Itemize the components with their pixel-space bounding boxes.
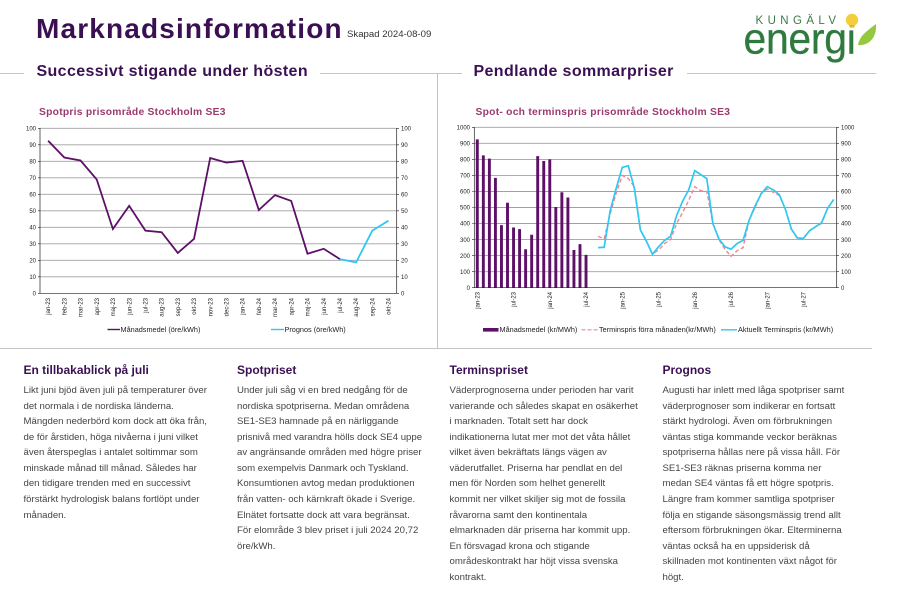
month labels: jan-26 (693, 291, 699, 310)
body text: varierande och således skapat en osäkerhet (450, 401, 638, 412)
month labels: nov-23 (208, 297, 214, 316)
body text: Väderprognoserna under perioden har varit (450, 385, 634, 396)
heading: Terminspriset (450, 363, 528, 377)
right axis labels: 600 (841, 190, 852, 196)
month labels: okt-24 (387, 297, 393, 315)
left axis labels: 60 (29, 192, 37, 198)
left axis labels: 40 (29, 226, 37, 232)
legend: Månadsmedel (kr/MWh) (500, 325, 577, 334)
chart title: spot price: Spotpris prisområde Stockholm SE3 (39, 107, 226, 118)
month labels: dec-23 (224, 297, 230, 316)
month labels: apr-23 (95, 297, 101, 315)
month labels: apr-24 (289, 297, 295, 315)
body text: öre/kWh. (237, 541, 275, 552)
body text: förstärkt hydrologisk balans fortlöpt under (24, 494, 199, 505)
month labels: jan-24 (241, 297, 247, 316)
month labels: maj-23 (111, 297, 117, 316)
bars: Månadsmedel (477, 139, 834, 288)
left axis labels: 30 (29, 242, 37, 248)
body text (237, 385, 422, 552)
body text (662, 385, 844, 583)
body text: högt. (662, 572, 684, 583)
body text: kommit ner vilket skiljer sig mot de fossila (450, 494, 625, 505)
left axis labels: 90 (29, 143, 37, 149)
series: Terminspris förra månaden (598, 175, 834, 256)
chart title: spot and forward price: Spot- och terminspris prisområde Stockholm SE3 (476, 107, 730, 118)
left axis labels: 800 (460, 158, 471, 164)
month labels: mar-23 (79, 297, 85, 317)
body text: medan SE4 väntas få ett högre spotpris. (662, 478, 834, 489)
right axis labels: 0 (841, 286, 845, 292)
body text: minskade månad till månad. Således har (24, 463, 197, 474)
body text (24, 385, 207, 521)
body text: det normala i de nordiska länderna. (24, 401, 174, 412)
combo chart: spot and forward price (457, 125, 855, 334)
body text: Mängden nederbörd kom dock att öka från, (24, 416, 207, 427)
month labels (475, 291, 808, 310)
right axis labels: 200 (841, 254, 852, 260)
month labels: jan-23 (46, 297, 52, 316)
left axis labels: 400 (460, 222, 471, 228)
month labels: jan-25 (620, 291, 626, 310)
body text: väntas stiga kommande veckor beräknas (662, 432, 837, 443)
right axis labels: 20 (401, 258, 408, 264)
body text: indikationerna lutat mer mot det våta hållet (450, 432, 630, 443)
right axis labels: 40 (401, 226, 408, 232)
month labels: jul-24 (338, 297, 344, 314)
legend (483, 325, 833, 334)
right axis labels: 900 (841, 142, 852, 148)
month labels (46, 297, 393, 317)
month labels: jul-26 (729, 291, 735, 308)
body text: följa en stigande säsongsmässig trend allt (662, 510, 841, 521)
month labels: maj-24 (306, 297, 312, 316)
left axis labels: 50 (29, 209, 37, 215)
creation date: Skapad 2024-08-09 (347, 29, 431, 40)
body text: av angränsande områden med högre priser (237, 447, 422, 458)
left axis labels: 80 (29, 160, 37, 166)
body text: i marknaden. Totalt sett har dock (450, 416, 588, 427)
body text: väntas också ha en uppsiderisk då (662, 541, 810, 552)
body text: även återspeglas i antalet soltimmar som (24, 447, 198, 458)
left axis labels: 200 (460, 254, 471, 260)
body text: För elområde 3 blev priset i juli 2024 20,72 (237, 525, 418, 536)
body text (450, 385, 638, 583)
right axis labels: 0 (401, 292, 405, 298)
month labels: jul-23 (512, 291, 518, 308)
body text: väderprognoser som indikerar en fortsatt (662, 401, 835, 412)
body text: Likt juni bjöd även juli på temperaturer över (24, 385, 207, 396)
month labels: feb-24 (257, 297, 263, 315)
month labels: mar-24 (273, 297, 279, 317)
title: Marknadsinformation (36, 13, 343, 44)
right axis labels: 400 (841, 222, 852, 228)
body text: Under juli såg vi en bred nedgång för de (237, 385, 408, 396)
body text: Augusti har inlett med låga spotpriser samt (662, 385, 844, 396)
line chart: spot price (26, 126, 412, 334)
month labels: jul-27 (802, 291, 808, 308)
month labels: jan-24 (548, 291, 554, 310)
body text: från vatten- och kärnkraft ökade i Sverige. (237, 494, 415, 505)
body text: Elnätet fortsatte dock att vara begränsat. (237, 510, 410, 521)
left axis labels: 300 (460, 238, 471, 244)
body text: men för Norden som helhet generellt (450, 478, 605, 489)
month labels: jun-24 (322, 297, 328, 316)
month labels: jul-25 (657, 291, 663, 308)
heading: Spotpriset (237, 363, 296, 377)
text column: Prognos (662, 363, 844, 583)
month labels: aug-23 (160, 297, 166, 317)
logo: Kungälv Energi: energi (744, 15, 856, 64)
series: Månadsmedel (48, 141, 340, 259)
body text: stärkt hydrologi. Även om förbrukningen (662, 416, 832, 427)
right axis labels: 50 (401, 209, 408, 215)
body text: nordiska spotpriserna. Medan områdena (237, 401, 409, 412)
right axis labels: 800 (841, 158, 852, 164)
right axis labels: 1000 (841, 126, 855, 132)
month labels: jun-23 (127, 297, 133, 316)
right axis labels: 500 (841, 206, 852, 212)
logo: Kungälv Energi: KUNGÄLV (756, 15, 840, 27)
series: Prognos (340, 221, 388, 262)
body text: den tidigare trenden med en successivt (24, 478, 190, 489)
body text: månaden. (24, 510, 66, 521)
body text: prisnivå med varandra hölls dock SE4 uppe (237, 432, 422, 443)
right axis labels: 80 (401, 160, 408, 166)
month labels: jan-27 (765, 291, 771, 310)
heading: Prognos (662, 363, 711, 377)
left axis labels: 600 (460, 190, 471, 196)
month labels: okt-23 (192, 297, 198, 315)
legend: Prognos (öre/kWh) (284, 325, 346, 334)
left axis labels: 500 (460, 206, 471, 212)
heading: En tillbakablick på juli (24, 363, 149, 377)
body text: kontrakt. (450, 572, 486, 583)
right axis labels: 60 (401, 192, 408, 198)
heading: left section: Successivt stigande under hösten (36, 62, 308, 80)
right axis labels: 10 (401, 275, 408, 281)
right axis labels: 300 (841, 238, 852, 244)
right axis labels: 30 (401, 242, 408, 248)
right axis labels: 100 (401, 126, 412, 132)
body text: spotpriserna hållas nere på vissa håll. För (662, 447, 840, 458)
body text: elmarknaden där priserna har kommit upp. (450, 525, 630, 536)
legend: Aktuellt Terminspris (kr/MWh) (738, 325, 833, 334)
body text: väderutfallet. Priserna har pendlat en del (450, 463, 622, 474)
left axis labels: 100 (460, 270, 471, 276)
body text: Konsumtionen avtog medan produktionen (237, 478, 415, 489)
body text: de för årstiden, höga nivåerna i juni vilket (24, 432, 198, 443)
month labels: jan-23 (475, 291, 481, 310)
left axis labels: 1000 (457, 126, 471, 132)
body text: En försvagad krona och stigande (450, 541, 590, 552)
text column: En tillbakablick på juli (24, 363, 207, 521)
legend: Månadsmedel (öre/kWh) (120, 325, 200, 334)
right axis labels (841, 126, 855, 292)
body text: som exempelvis Danmark och Tyskland. (237, 463, 409, 474)
month labels: sep-23 (176, 297, 182, 316)
left axis labels: 70 (29, 176, 37, 182)
month labels: jul-24 (584, 291, 590, 308)
right axis labels: 700 (841, 174, 852, 180)
right axis labels: 70 (401, 176, 408, 182)
body text: skillnaden mot kontinenten växt något för (662, 556, 837, 567)
body text: Längre fram kommer samtliga spotpriser (662, 494, 835, 505)
left axis labels: 900 (460, 142, 471, 148)
legend: Terminspris förra månaden(kr/MWh) (599, 325, 716, 334)
left axis labels (457, 126, 471, 292)
month labels: jul-23 (144, 297, 150, 314)
left axis labels: 100 (26, 126, 37, 132)
body text: SE1-SE3 räknas priserna komma ner (662, 463, 821, 474)
body text: SE1-SE3 hamnade på en närliggande (237, 416, 399, 427)
month labels: aug-24 (354, 297, 360, 317)
heading: right section: Pendlande sommarpriser (474, 62, 674, 80)
month labels: feb-23 (62, 297, 68, 315)
left axis labels: 10 (29, 275, 37, 281)
text column: Spotpriset (237, 363, 422, 552)
legend (108, 325, 346, 334)
right axis labels (401, 126, 412, 298)
text column: Terminspriset (450, 363, 638, 583)
left axis labels: 20 (29, 258, 37, 264)
month labels: sep-24 (370, 297, 376, 316)
right axis labels: 90 (401, 143, 408, 149)
left axis labels: 700 (460, 174, 471, 180)
body text: vilket även bekräftats längs vägen av (450, 447, 607, 458)
body text: eftersom förbrukningen ökar. Elterminerna (662, 525, 842, 536)
left axis labels: 0 (467, 286, 471, 292)
body text: områdeskontrakt har höjt vissa svenska (450, 556, 618, 567)
body text: råvarorna samt den kontinentala (450, 510, 587, 521)
left axis labels: 0 (33, 292, 37, 298)
series: Aktuellt Terminspris (598, 166, 834, 254)
left axis labels (26, 126, 37, 298)
right axis labels: 100 (841, 270, 852, 276)
